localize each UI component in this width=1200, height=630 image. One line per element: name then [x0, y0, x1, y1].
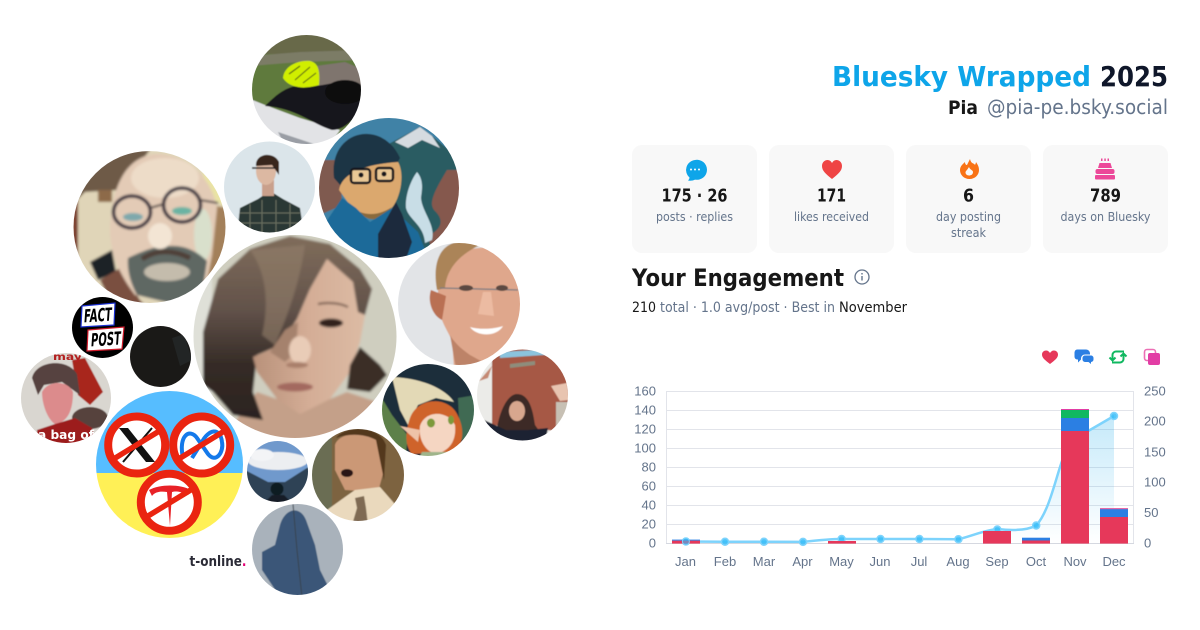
avatar: man with tie, open mouth [312, 429, 404, 521]
user name and handle: Pia [948, 97, 978, 119]
left axis labels: 100 [634, 440, 656, 456]
engagement summary: 210 [632, 300, 656, 316]
avatar: silhouette in mountain valley [247, 441, 308, 502]
cumulative area [686, 416, 1114, 544]
month labels: Nov [1063, 554, 1087, 569]
right axis labels [1144, 384, 1166, 550]
stat label: day posting [936, 209, 1001, 224]
month labels: Feb [714, 554, 736, 569]
stat label: days on Bluesky [1060, 209, 1151, 224]
right axis labels: 200 [1144, 414, 1166, 428]
panel: day posting streak [906, 145, 1031, 253]
icon: likes [1042, 350, 1058, 364]
left axis labels: 0 [649, 536, 656, 550]
month labels: Oct [1026, 554, 1046, 569]
stat value: 175 · 26 [662, 186, 728, 206]
avatar: Fact Post logo: FACT [83, 304, 113, 328]
panel: likes received [769, 145, 894, 253]
icon: flame [960, 159, 979, 179]
left axis labels: 40 [642, 498, 656, 512]
left axis labels: 20 [642, 516, 656, 532]
right axis labels: 0 [1144, 536, 1151, 550]
month labels: May [829, 554, 854, 569]
stacked bars [672, 409, 1128, 544]
re-drawn January point over its bar [682, 538, 689, 545]
engagement summary: November [839, 300, 907, 316]
stat value: 6 [963, 186, 974, 206]
left axis labels: 160 [634, 384, 656, 398]
text: poster lettering: may [53, 352, 83, 363]
t-online logo: t-online. [190, 554, 246, 570]
cumulative points [682, 412, 1118, 545]
icon: info [855, 270, 869, 284]
stat value: 171 [817, 186, 846, 206]
left axis labels: 80 [642, 460, 656, 474]
stat label: posts · replies [656, 209, 733, 224]
icon: banned X logo [108, 416, 165, 474]
right axis labels: 250 [1144, 384, 1166, 398]
left axis labels: 140 [634, 402, 656, 418]
month labels: Jun [870, 554, 890, 569]
month labels: Aug [946, 554, 970, 569]
avatar: dark photo [130, 326, 191, 387]
right axis labels: 50 [1144, 505, 1158, 520]
panel: posts and replies [632, 145, 757, 253]
month labels: Jul [911, 554, 927, 569]
heading: your engagement: Your Engagement [631, 264, 844, 292]
icon: quotes [1144, 350, 1160, 365]
month labels [675, 554, 1126, 569]
avatar: smiling man with glasses [396, 241, 522, 368]
title: 2025 [1100, 60, 1168, 93]
month labels: Sep [985, 554, 1009, 569]
icon: speech bubble [686, 160, 707, 181]
cumulative line [686, 416, 1114, 542]
avatar: man in plaid shirt [222, 139, 317, 235]
icon: heart [822, 160, 842, 179]
month labels: Jan [675, 554, 696, 569]
avatar: red-haired elf illustration [382, 364, 474, 456]
icon: birthday cake [1095, 158, 1115, 180]
panel: days on Bluesky [1043, 145, 1168, 253]
icon: banned Tesla logo [141, 474, 198, 531]
avatar: crow with yellow helmet [252, 35, 361, 144]
avatar: no X, no Meta, no Tesla badge [94, 389, 246, 541]
icon: banned Meta logo [173, 416, 230, 474]
left axis labels [634, 384, 656, 550]
avatar: retro pin-up illustration [19, 351, 113, 445]
avatar: woman with brown hair (largest) [190, 232, 400, 442]
icon: replies [1074, 349, 1094, 364]
left axis labels: 60 [642, 478, 656, 494]
engagement summary: total · 1.0 avg/post · Best in [660, 300, 835, 316]
month labels: Mar [753, 554, 776, 569]
icon: reposts [1110, 352, 1126, 362]
avatar cluster [19, 33, 571, 598]
user name and handle: @pia-pe.bsky.social [987, 95, 1168, 119]
chart: monthly engagement [634, 384, 1166, 569]
chart grid [666, 391, 1134, 544]
stat label: likes received [794, 209, 869, 224]
avatar: bald man with round glasses [72, 150, 230, 310]
month labels: Dec [1102, 554, 1126, 569]
avatar: woman in front of brick wall [477, 350, 568, 440]
avatar: Fact Post logo: POST [90, 328, 122, 352]
left axis labels: 120 [634, 422, 656, 436]
avatar: anime man in beanie [314, 116, 461, 262]
stat value: 789 [1090, 186, 1121, 206]
chart legend icons [1042, 349, 1160, 365]
right axis labels: 150 [1144, 444, 1166, 460]
avatar: retro pin-up illustration: a bag of [38, 428, 95, 442]
month labels: Apr [792, 554, 813, 569]
title: Bluesky Wrapped [832, 60, 1091, 93]
avatar: shadow on a wall [252, 504, 343, 595]
stat label line two: streak [951, 225, 987, 240]
right axis labels: 100 [1144, 474, 1166, 490]
avatar: Fact Post logo [72, 297, 133, 358]
